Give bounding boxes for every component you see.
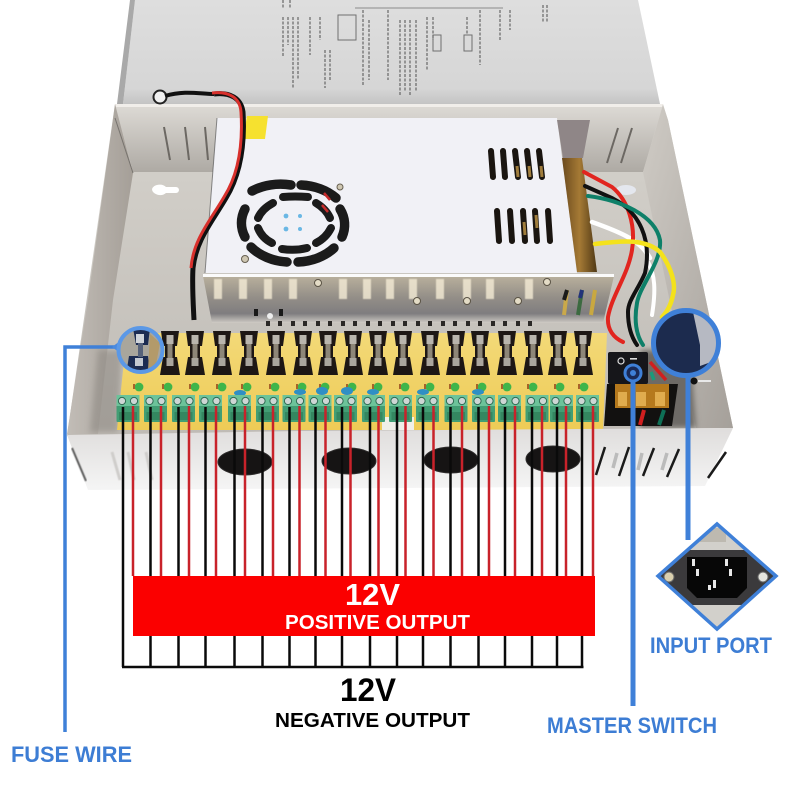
vent slots	[491, 151, 550, 241]
callout: input port	[650, 306, 722, 540]
switching power supply module	[203, 116, 614, 323]
fuse holders	[160, 331, 593, 375]
negative output label	[275, 672, 470, 732]
ventilation teeth row	[266, 321, 532, 326]
lid with printed wiring diagram	[117, 0, 660, 104]
cable grommets	[218, 446, 580, 475]
screws on cover	[242, 184, 343, 262]
callout: master switch	[625, 365, 641, 706]
label: input port: INPUT PORT	[650, 633, 773, 658]
terminal strip	[557, 120, 597, 272]
shadow lower left	[90, 350, 122, 432]
input wires from terminal strip	[584, 172, 674, 345]
plastic clip	[616, 185, 636, 195]
back wall with slots	[115, 104, 663, 172]
front perforated face	[203, 276, 614, 323]
LED indicators	[133, 383, 588, 396]
fan grille	[241, 184, 345, 262]
circuit board	[116, 321, 607, 430]
magnified connector	[656, 313, 716, 373]
right side wall	[643, 105, 733, 428]
positive output bar	[133, 576, 595, 636]
left side wall	[67, 104, 133, 434]
output terminal blocks	[116, 395, 599, 422]
label: negative output: NEGATIVE OUTPUT	[275, 710, 470, 732]
ventilation slashes	[596, 447, 726, 478]
label: 12V negative: 12V	[340, 672, 397, 708]
icon: IEC input socket in diamond	[655, 520, 780, 632]
cover plate	[205, 118, 577, 273]
keyhole left	[152, 185, 179, 195]
warning sticker	[243, 116, 268, 139]
magnified fuse	[120, 330, 160, 370]
fan centre marks	[284, 214, 302, 231]
power lead red and black	[191, 93, 243, 320]
label: 12V positive: 12V	[345, 577, 400, 612]
label: fuse wire: FUSE WIRE	[11, 742, 132, 767]
callout: fuse wire	[65, 325, 167, 732]
label: master switch: MASTER SWITCH	[547, 713, 717, 738]
label: positive output: POSITIVE OUTPUT	[285, 612, 470, 634]
lid hinge wire with ground lug	[154, 90, 214, 104]
red positive output wires	[133, 406, 593, 576]
rocker switch and mains terminal	[604, 350, 711, 428]
metal enclosure interior	[67, 104, 733, 436]
front wall of enclosure	[67, 428, 733, 490]
printed manual text	[283, 0, 547, 96]
black negative output wires	[122, 407, 584, 667]
